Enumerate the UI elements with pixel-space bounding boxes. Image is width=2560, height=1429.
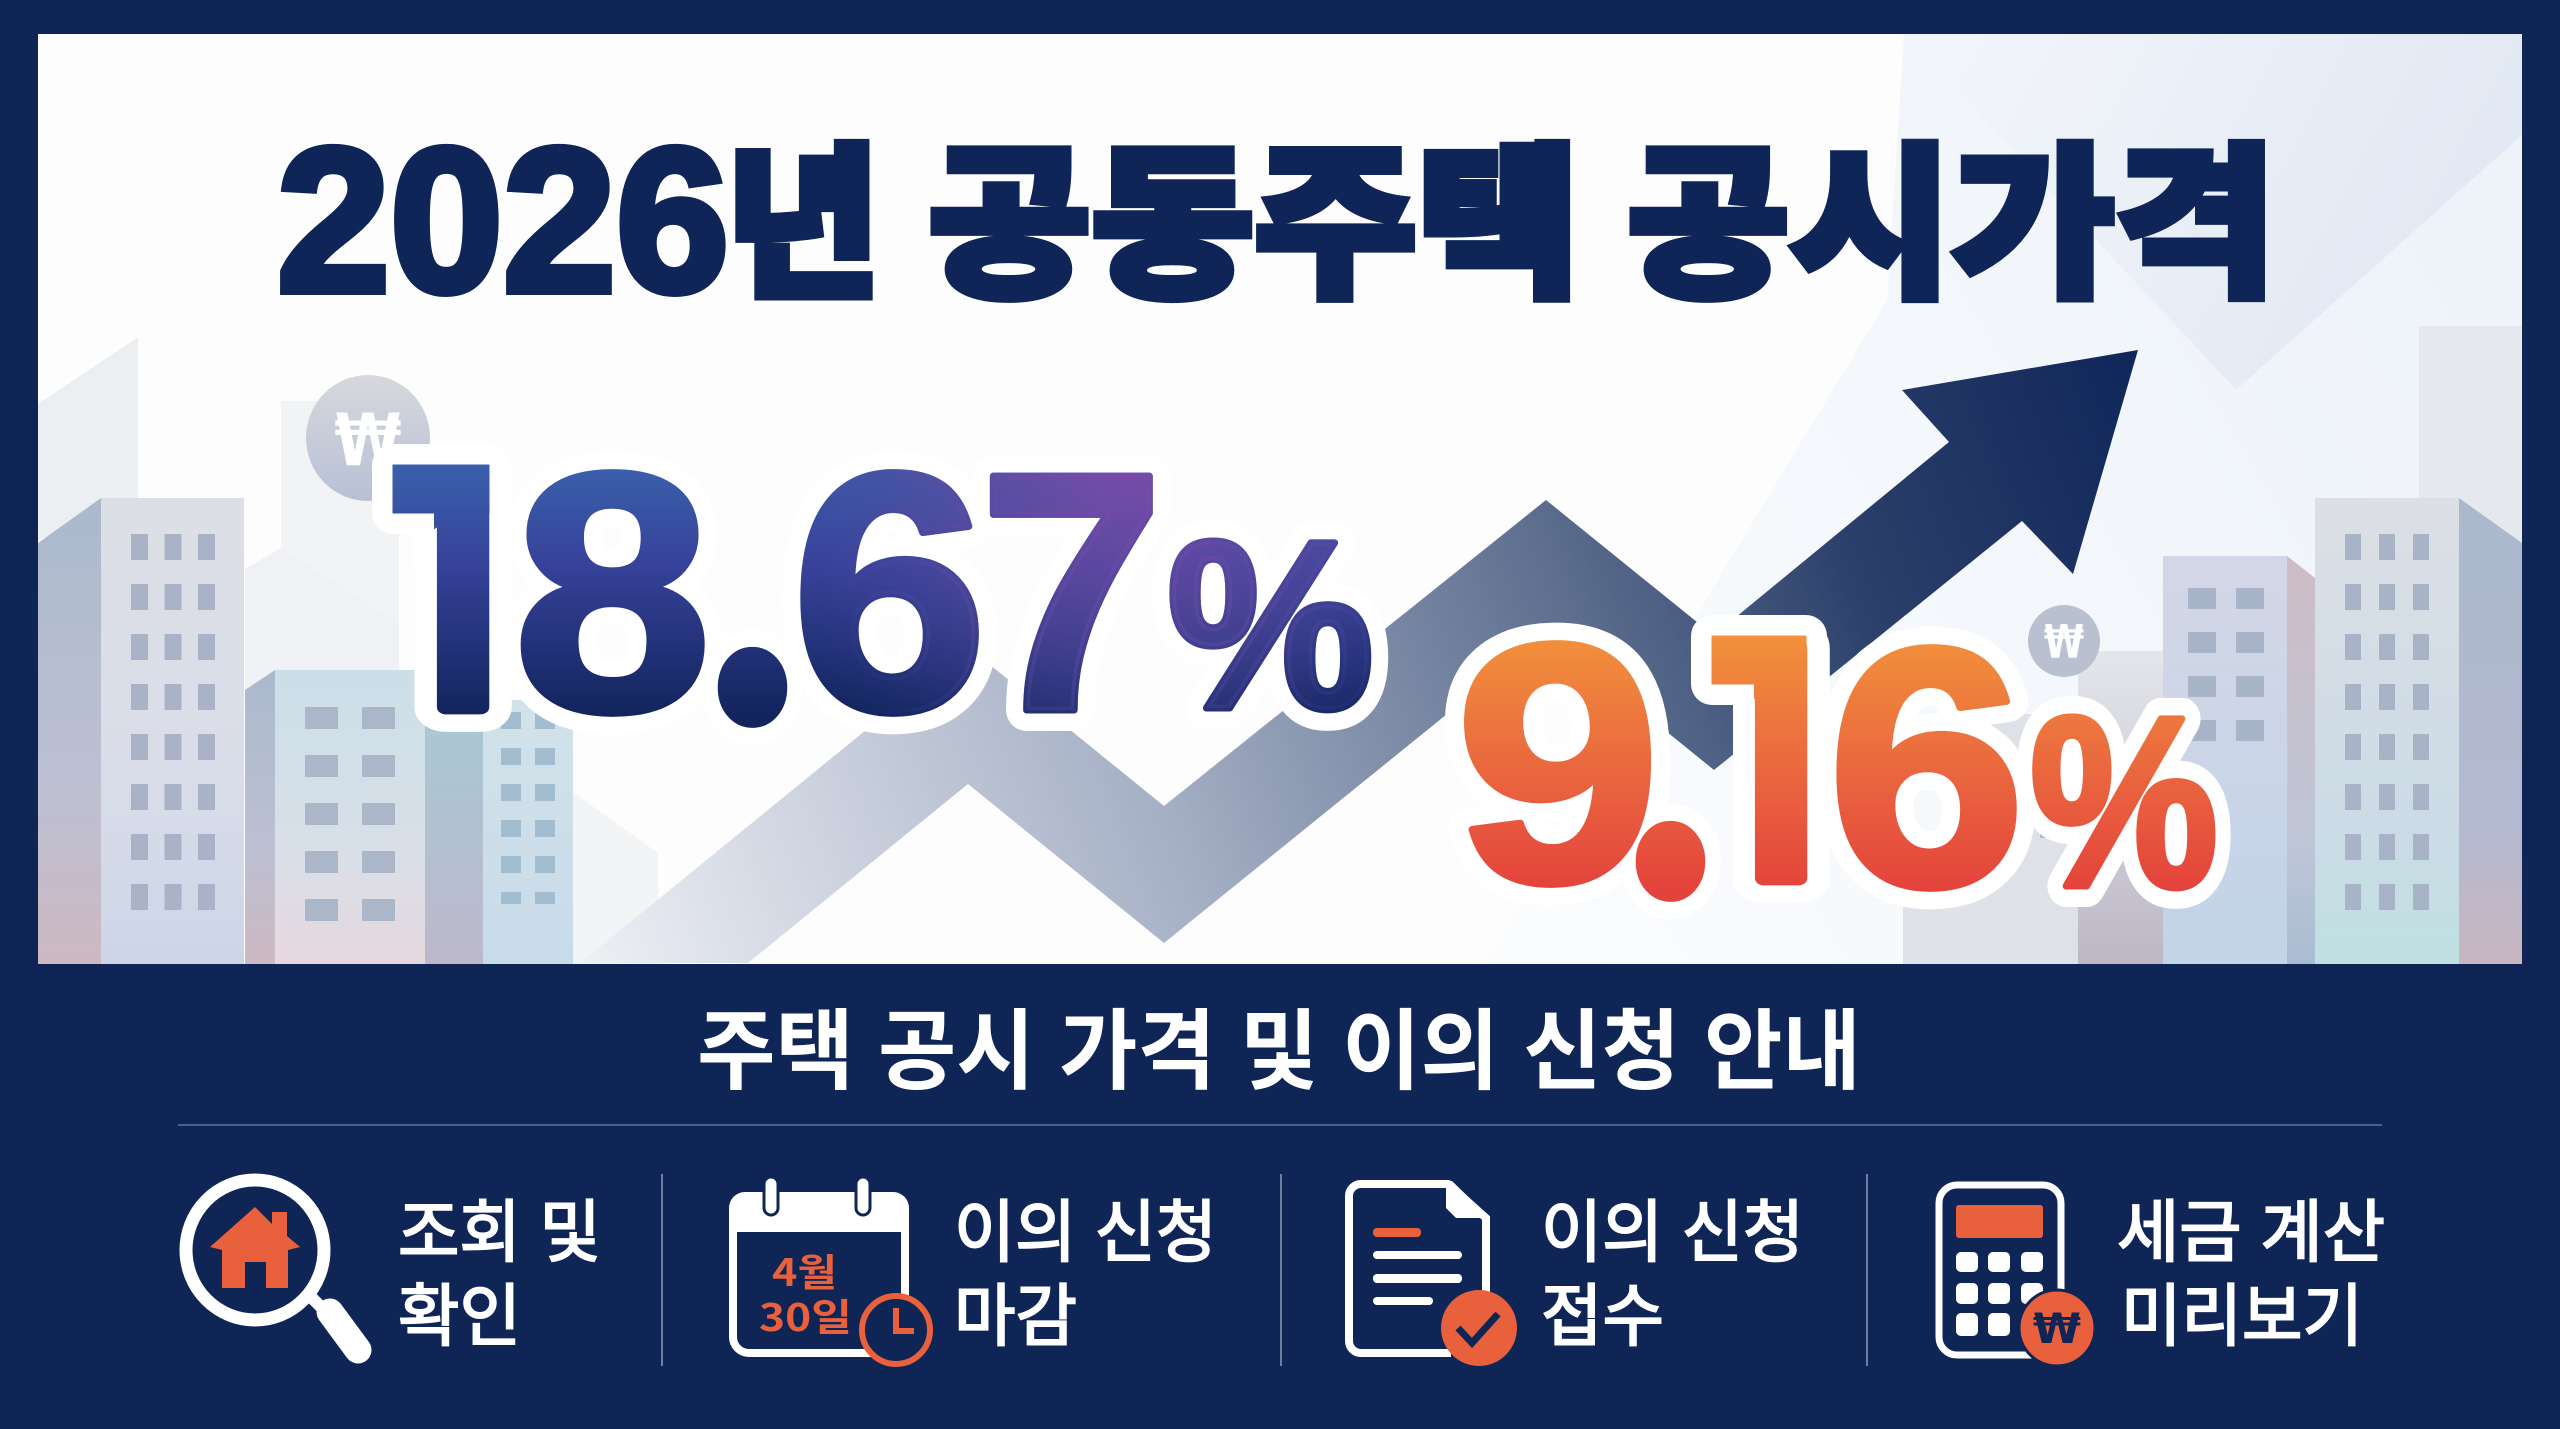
item: filing bbox=[1349, 1177, 1804, 1366]
item: lookup bbox=[186, 1177, 601, 1360]
label: 조회 및 bbox=[398, 1177, 601, 1276]
zigzag rising arrow bbox=[580, 350, 2138, 963]
stat: 9.16 percent: . bbox=[1618, 499, 1723, 984]
label: 마감 bbox=[954, 1261, 1077, 1360]
stat: 9.16 percent bbox=[1445, 615, 2231, 910]
stat: 9.16 percent: 1 bbox=[1649, 616, 1895, 929]
icon: won coin left bbox=[306, 375, 430, 501]
label: 접수 bbox=[1541, 1261, 1664, 1360]
stat: 18.67 percent: 6 bbox=[791, 403, 988, 783]
stat: 18.67 percent: 7 bbox=[979, 403, 1164, 783]
icon: calendar with clock: 30일 bbox=[759, 1287, 852, 1342]
stat: 18.67 percent: 7 bbox=[979, 403, 1164, 783]
icon: calendar with clock bbox=[729, 1177, 930, 1364]
stat: 9.16 percent: % bbox=[2030, 667, 2218, 938]
stat: 9.16 percent: 6 bbox=[1827, 578, 2026, 958]
label: 이의 신청 bbox=[1541, 1177, 1804, 1276]
label bbox=[1541, 1177, 1804, 1360]
left cityscape bbox=[38, 337, 658, 964]
icon: calculator with won coin: ₩ bbox=[2033, 1304, 2081, 1353]
icon: calculator with won coin bbox=[1939, 1185, 2095, 1366]
label bbox=[2117, 1177, 2385, 1360]
stat: 18.67 percent: 6 bbox=[791, 403, 988, 783]
stat: 18.67 percent: % bbox=[1167, 491, 1374, 759]
right pale background shape bbox=[1485, 34, 2522, 964]
label bbox=[954, 1177, 1217, 1360]
title: 공시가격 bbox=[1627, 90, 2277, 331]
icon: magnifier with house bbox=[186, 1180, 358, 1350]
title: 2026 bbox=[277, 106, 729, 335]
item: tax preview bbox=[1939, 1177, 2385, 1366]
stat: 9.16 percent: 9 bbox=[1455, 574, 1661, 954]
stat: 18.67 percent: 1 bbox=[331, 445, 577, 758]
stat: 18.67 percent: % bbox=[1167, 491, 1374, 759]
right cityscape bbox=[1903, 326, 2522, 964]
stat: 18.67 percent bbox=[372, 444, 1388, 734]
title: 년 bbox=[725, 90, 881, 331]
icon: won coin right bbox=[2028, 605, 2100, 677]
stat: 18.67 percent: . bbox=[700, 325, 805, 810]
stat: 18.67 percent: 6 bbox=[791, 403, 988, 783]
icon: calendar with clock: 4월 bbox=[772, 1242, 837, 1297]
label: 세금 계산 bbox=[2117, 1177, 2385, 1276]
stat: 18.67 percent: % bbox=[1167, 491, 1374, 759]
icon: won coin right: ₩ bbox=[2044, 615, 2084, 669]
icon: won coin left: ₩ bbox=[334, 398, 402, 482]
stat: 18.67 percent: 8 bbox=[513, 403, 712, 783]
panel: hero illustration bbox=[38, 34, 2522, 964]
icon: document with check bbox=[1349, 1181, 1517, 1366]
stat: 9.16 percent: 9 bbox=[1455, 574, 1661, 954]
stat: 9.16 percent: . bbox=[1618, 499, 1723, 984]
label: 확인 bbox=[398, 1261, 521, 1360]
stat: 18.67 percent: 1 bbox=[331, 445, 577, 758]
subtitle: 주택 공시 가격 및 이의 신청 안내 bbox=[697, 981, 1861, 1108]
label: 미리보기 bbox=[2121, 1261, 2363, 1360]
item: deadline bbox=[729, 1177, 1217, 1364]
stat: 9.16 percent: 6 bbox=[1827, 578, 2026, 958]
title: 공동주택 bbox=[928, 90, 1580, 331]
label bbox=[398, 1177, 601, 1360]
stat: 9.16 percent: % bbox=[2030, 667, 2218, 938]
stat: 18.67 percent: . bbox=[700, 325, 805, 810]
stat: 18.67 percent: 7 bbox=[979, 403, 1164, 783]
label: 이의 신청 bbox=[954, 1177, 1217, 1276]
title bbox=[277, 90, 2277, 335]
stat: 18.67 percent: 8 bbox=[513, 403, 712, 783]
stat: 9.16 percent: 1 bbox=[1649, 616, 1895, 929]
top right pale triangle bbox=[1904, 34, 2522, 390]
